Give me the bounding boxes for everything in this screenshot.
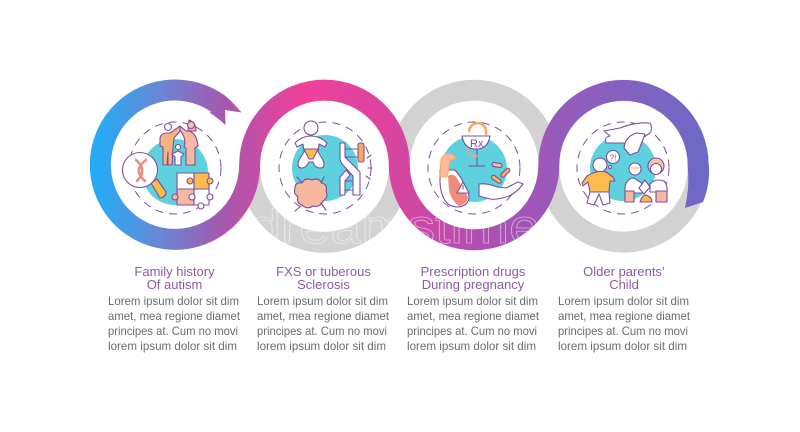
body: [407, 294, 540, 353]
icon: magnifier with DNA: [122, 152, 166, 198]
icon group 2: FXS: [279, 121, 372, 214]
dashed ring: [577, 122, 669, 214]
dashed ring: [428, 122, 520, 214]
body: Lorem ipsum dolor sit dim: [108, 294, 239, 308]
icon: family: [160, 120, 198, 165]
body: principes at. Cum no movi: [407, 324, 537, 338]
body: principes at. Cum no movi: [108, 324, 238, 338]
icon: puzzle: [172, 173, 213, 209]
teal backdrop: [441, 136, 507, 202]
heading: Family history: [134, 264, 215, 279]
icon: Rx bowl: Rx: [470, 138, 484, 150]
icon: grandparents: [625, 158, 667, 202]
icon group 4: older parents: [577, 122, 669, 214]
dashed ring: [129, 122, 221, 214]
body: Lorem ipsum dolor sit dim: [257, 294, 388, 308]
column 2 text: [257, 264, 390, 353]
heading: Sclerosis: [297, 277, 350, 292]
body: amet, mea regione diamet: [108, 309, 241, 323]
icon: hands: [604, 123, 652, 155]
body: Lorem ipsum dolor sit dim: [407, 294, 538, 308]
body: lorem ipsum dolor sit dim: [108, 339, 237, 353]
column 4 text: [558, 264, 691, 353]
icon: pills and hand: [479, 162, 523, 199]
icon group 1: family history: [122, 120, 221, 214]
grey ribbon: [250, 90, 698, 242]
heading: During pregnancy: [422, 277, 525, 292]
body: [558, 294, 691, 353]
body: lorem ipsum dolor sit dim: [257, 339, 386, 353]
icon: toddler: [582, 158, 615, 205]
icon: chromosome: [340, 143, 372, 195]
heading: Child: [609, 277, 639, 292]
column 1 text: [108, 264, 241, 353]
dashed ring: [279, 122, 371, 214]
body: lorem ipsum dolor sit dim: [558, 339, 687, 353]
heading: Older parents’: [583, 264, 665, 279]
body: [108, 294, 241, 353]
teal backdrop: [292, 135, 358, 201]
heading: Of autism: [147, 277, 202, 292]
body: lorem ipsum dolor sit dim: [407, 339, 536, 353]
heading: Prescription drugs: [421, 264, 526, 279]
teal backdrop: [590, 135, 656, 201]
heading: FXS or tuberous: [276, 264, 371, 279]
body: [257, 294, 390, 353]
icon: question bubble: ?!: [610, 154, 616, 162]
icon: brain: [294, 177, 327, 211]
icon: pregnant woman: [440, 154, 469, 207]
body: principes at. Cum no movi: [257, 324, 387, 338]
body: amet, mea regione diamet: [407, 309, 540, 323]
body: amet, mea regione diamet: [558, 309, 691, 323]
column 3 text: [407, 264, 540, 353]
icon group 3: prescription drugs: [428, 122, 523, 214]
body: Lorem ipsum dolor sit dim: [558, 294, 689, 308]
teal backdrop: [142, 139, 208, 205]
gradient ribbon with arrow: [100, 90, 709, 240]
body: amet, mea regione diamet: [257, 309, 390, 323]
icon: baby: [295, 121, 327, 168]
body: principes at. Cum no movi: [558, 324, 688, 338]
watermark: dreamstime: [250, 201, 540, 254]
